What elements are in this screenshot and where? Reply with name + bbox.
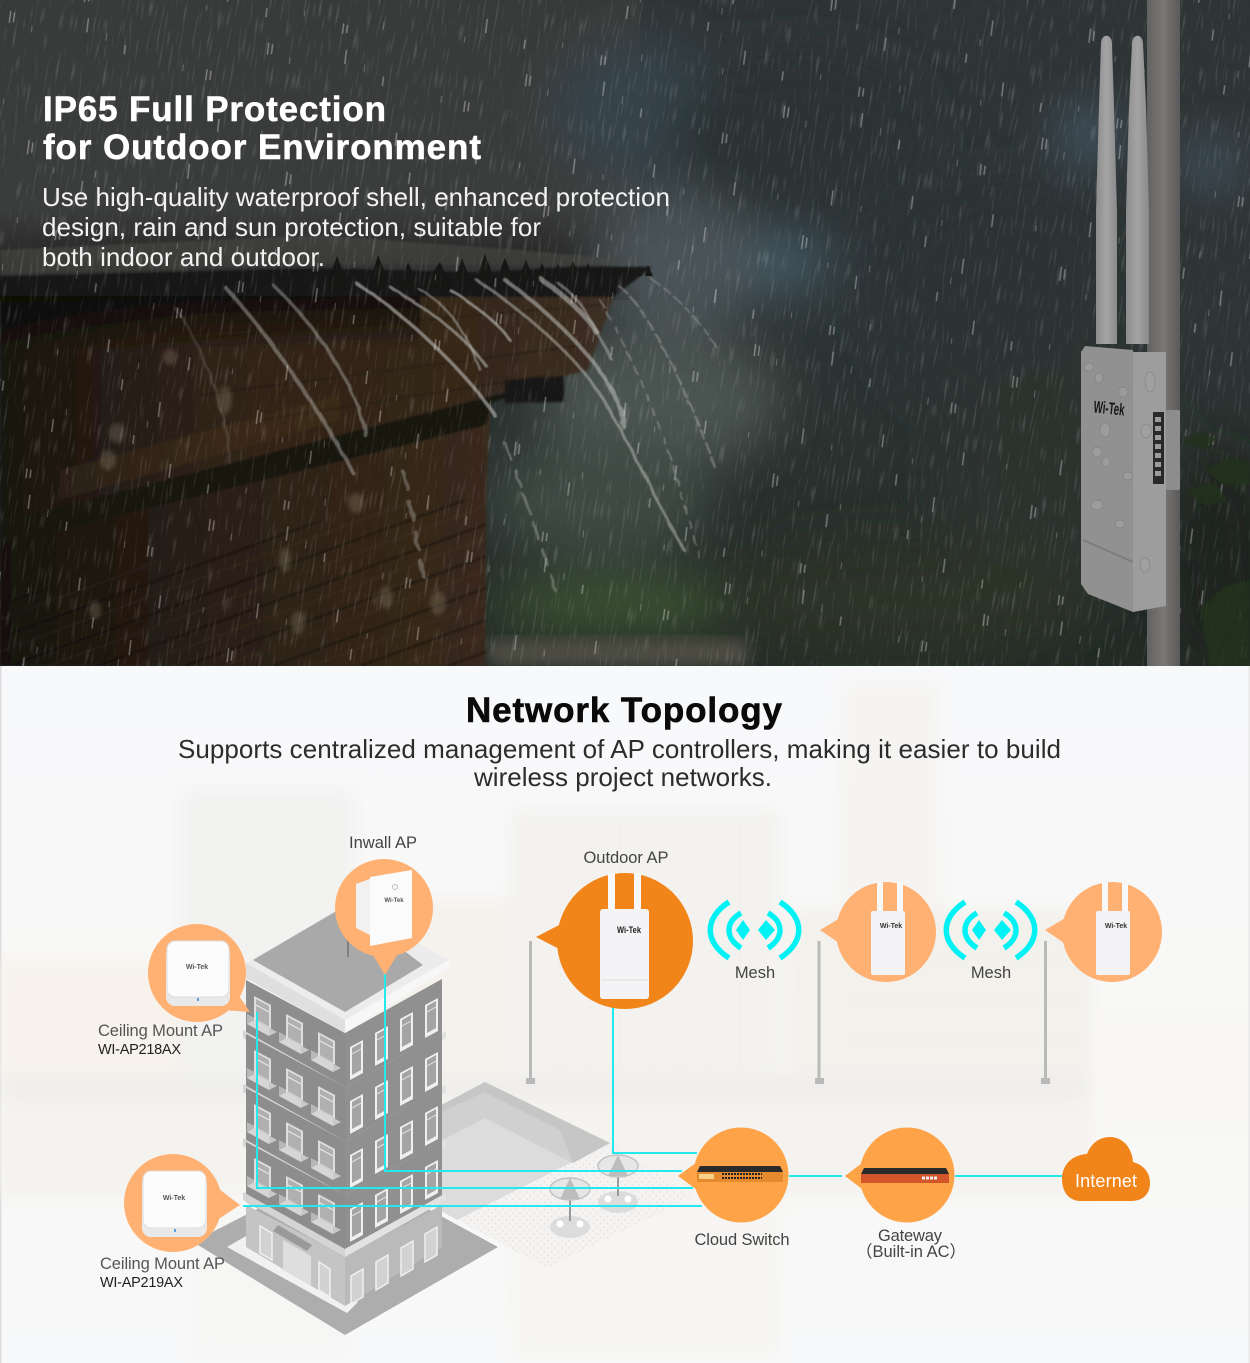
rain overlay [0, 0, 1250, 666]
device body [1133, 352, 1166, 612]
node: Ceiling Mount AP WI-AP219AX: WI-AP219AX [100, 1275, 183, 1291]
node: Outdoor AP: Wi-Tek [617, 925, 642, 936]
antennas [1096, 36, 1117, 344]
node: Inwall AP: Wi-Tek [384, 898, 404, 904]
node: mesh AP 3: Wi-Tek [1105, 923, 1127, 930]
house [0, 235, 652, 666]
text block: protection description: both indoor and outdoor. [42, 242, 325, 272]
node: Ceiling Mount AP WI-AP218AX [98, 924, 250, 1058]
pole and outdoor access point on the photo [1081, 0, 1180, 666]
water streams off the roof [174, 280, 716, 590]
node: Inwall AP: Inwall AP [349, 834, 417, 852]
leaves [1180, 432, 1250, 666]
heading: IP65 protection: IP65 Full Protection [43, 90, 386, 129]
node: Ceiling Mount AP WI-AP218AX: WI-AP218AX [98, 1042, 181, 1058]
device logo: Wi-Tek [1093, 397, 1126, 420]
icon: mesh signal 1 [710, 902, 799, 958]
node: Ceiling Mount AP WI-AP219AX: Wi-Tek [163, 1195, 185, 1202]
roof tile spikes [332, 254, 653, 276]
text block: protection description [42, 182, 670, 272]
water droplets [1084, 363, 1155, 572]
node: mesh AP 2: Wi-Tek [880, 923, 902, 930]
node: Inwall AP [335, 834, 433, 975]
upper floors [243, 979, 446, 1095]
panel: network topology background [0, 666, 1250, 1363]
text block: topology description [178, 734, 1061, 792]
label: Mesh 1: Mesh [735, 964, 775, 982]
umbrella tables [550, 1155, 638, 1238]
roof [246, 905, 449, 1033]
node: Ceiling Mount AP WI-AP219AX: Ceiling Mount AP [100, 1255, 225, 1273]
text block: protection description: design, rain and sun protection, suitable for [42, 212, 541, 242]
node: Internet cloud [1062, 1137, 1150, 1201]
heading: Network Topology: Network Topology [466, 691, 783, 730]
node: Ceiling Mount AP WI-AP219AX [100, 1154, 240, 1291]
network cabling [243, 972, 1062, 1206]
illustration: courtyard [430, 1082, 693, 1268]
poles [526, 941, 1050, 1084]
node: Gateway: （Built-in AC） [856, 1242, 966, 1261]
heading: IP65 protection: for Outdoor Environment [43, 128, 481, 167]
node: Internet cloud: Internet [1075, 1171, 1137, 1191]
text block: topology description: wireless project networks. [473, 762, 772, 792]
ground floor [246, 1205, 345, 1306]
faint city skyline [0, 680, 1090, 1360]
node: Outdoor AP [536, 849, 693, 1009]
text block: topology description: Supports centralized management of AP controllers, making it easier to build [178, 734, 1061, 764]
node: Gateway: Gateway [878, 1227, 943, 1245]
node: Cloud Switch [678, 1128, 790, 1249]
node: Cloud Switch: Cloud Switch [694, 1231, 790, 1249]
illustration: apartment building [193, 905, 498, 1335]
blurred foreground drops [89, 349, 446, 635]
icon: inwall device [356, 879, 370, 935]
label: Mesh 2: Mesh [971, 964, 1011, 982]
node: mesh AP 3 [1045, 882, 1162, 982]
node: mesh AP 2 [820, 882, 936, 982]
node: Ceiling Mount AP WI-AP218AX: Ceiling Mount AP [98, 1022, 223, 1040]
icon: mesh signal 2 [946, 902, 1035, 958]
ground plate [193, 1164, 498, 1335]
node: Ceiling Mount AP WI-AP218AX: Wi-Tek [186, 964, 208, 971]
node: Gateway [845, 1128, 966, 1261]
heading: IP65 protection [43, 90, 481, 167]
distant forest shading [490, 40, 1250, 670]
panel: rain photo [0, 0, 1250, 666]
node: Outdoor AP: Outdoor AP [584, 849, 668, 867]
text block: protection description: Use high-quality waterproof shell, enhanced protection [42, 182, 670, 212]
